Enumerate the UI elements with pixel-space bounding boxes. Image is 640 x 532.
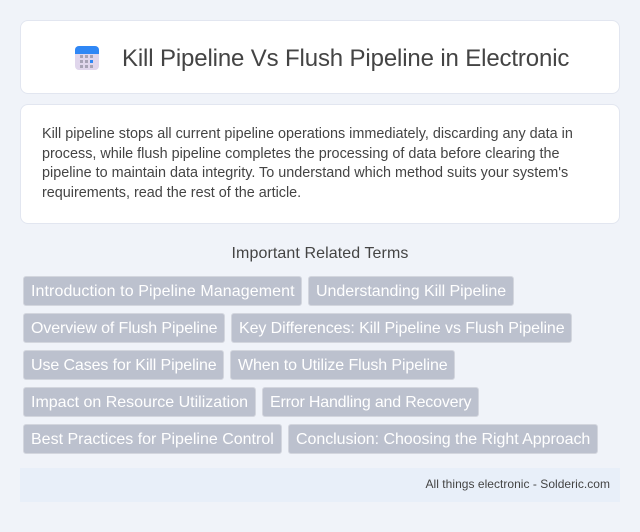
- header card: [20, 20, 620, 94]
- intro text panel: [20, 104, 620, 224]
- chip: Conclusion: Conclusion: Choosing the Right Approach: [296, 431, 590, 448]
- chip: Key Differences: [231, 313, 572, 343]
- chip: Impact on Resource Utilization: [23, 387, 256, 417]
- intro text block: [42, 126, 573, 201]
- chip: Understanding Kill Pipeline: [308, 276, 514, 306]
- chip: Introduction to Pipeline Management: [23, 276, 302, 306]
- chip: Impact on Resource Utilization: Impact on Resource Utilization: [31, 394, 248, 411]
- title: Kill Pipeline Vs Flush Pipeline in Electronic: [122, 45, 569, 72]
- chip: Understanding Kill Pipeline: Understanding Kill Pipeline: [316, 283, 506, 300]
- intro text block: requirements, read the rest of the article.: [42, 185, 301, 201]
- chip: Best Practices for Pipeline Control: Best Practices for Pipeline Control: [31, 431, 274, 448]
- chip: Use Cases for Kill Pipeline: [23, 350, 224, 380]
- chip: Best Practices for Pipeline Control: [23, 424, 282, 454]
- footer: All things electronic - Solderic.com: [426, 477, 610, 491]
- term chips: [23, 276, 598, 454]
- chip: When to Utilize Flush Pipeline: When to Utilize Flush Pipeline: [238, 357, 448, 374]
- chip: Overview of Flush Pipeline: [23, 313, 225, 343]
- footer: [20, 468, 620, 502]
- icon: calendar: [75, 46, 99, 70]
- chip: Introduction to Pipeline Management: Introduction to Pipeline Management: [31, 283, 295, 300]
- chip: Conclusion: [288, 424, 598, 454]
- chip: When to Utilize Flush Pipeline: [230, 350, 455, 380]
- intro text block: Kill pipeline stops all current pipeline operations immediately, discarding any data in: [42, 126, 573, 142]
- related terms heading: Important Related Terms: [232, 245, 408, 262]
- chip: Overview of Flush Pipeline: Overview of Flush Pipeline: [31, 320, 217, 337]
- intro text block: pipeline to maintain data integrity. To understand which method suits your system's: [42, 165, 568, 181]
- chip: Key Differences: Key Differences: Kill Pipeline vs Flush Pipeline: [239, 320, 565, 337]
- intro text block: process, while flush pipeline completes the processing of data before clearing the: [42, 146, 560, 162]
- chip: Use Cases for Kill Pipeline: Use Cases for Kill Pipeline: [31, 357, 217, 374]
- chip: Error Handling and Recovery: Error Handling and Recovery: [270, 394, 471, 411]
- chip: Error Handling and Recovery: [262, 387, 479, 417]
